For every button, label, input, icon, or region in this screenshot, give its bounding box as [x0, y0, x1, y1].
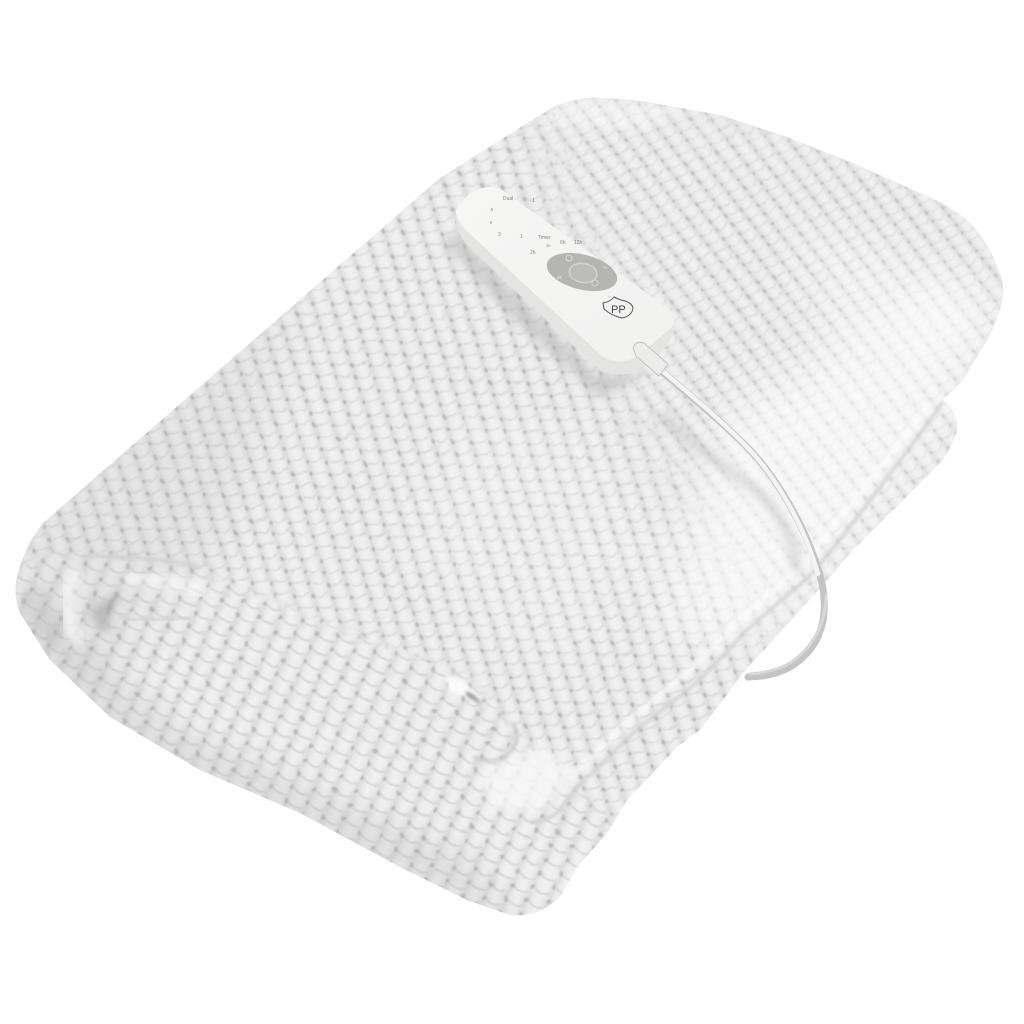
remote labels: ∨ — [489, 220, 493, 226]
shadow under remote — [443, 232, 648, 398]
curl and gap in the fold — [445, 676, 517, 761]
remote labels: 6h — [560, 240, 566, 246]
remote centre button — [568, 261, 598, 285]
remote labels: 4h — [546, 243, 550, 248]
remote labels: ∧ — [490, 207, 494, 213]
blanket shading — [0, 95, 1000, 930]
remote labels: 12h — [574, 240, 583, 246]
remote labels: Dual — [503, 196, 513, 202]
blanket right surface texture — [521, 98, 1003, 640]
power cord — [660, 369, 826, 677]
remote labels — [489, 196, 583, 256]
product illustration: folded heated blanket with remote — [16, 98, 1004, 916]
remote labels: 2h — [530, 250, 536, 256]
remote logo shield: PP — [611, 304, 626, 316]
remote logo shield — [603, 297, 633, 318]
remote labels: Timer — [538, 235, 551, 241]
remote control pad — [543, 246, 621, 298]
blanket — [16, 98, 1004, 916]
remote labels: 3 — [498, 232, 501, 238]
remote body top — [456, 187, 674, 362]
highlight above crease — [570, 405, 930, 778]
fold spiral at left end — [30, 556, 205, 642]
remote pad symbols — [557, 255, 607, 286]
remote body side — [456, 205, 673, 375]
crease between blanket layers — [530, 402, 943, 822]
remote labels: 1 — [532, 198, 535, 204]
shadow of cord — [660, 415, 797, 572]
blanket main surface texture — [18, 98, 999, 909]
soft white overlap — [482, 745, 575, 810]
remote control — [456, 187, 674, 376]
remote labels: 1 — [520, 234, 523, 240]
cord connector — [633, 342, 668, 376]
blanket front roll texture — [16, 547, 614, 916]
